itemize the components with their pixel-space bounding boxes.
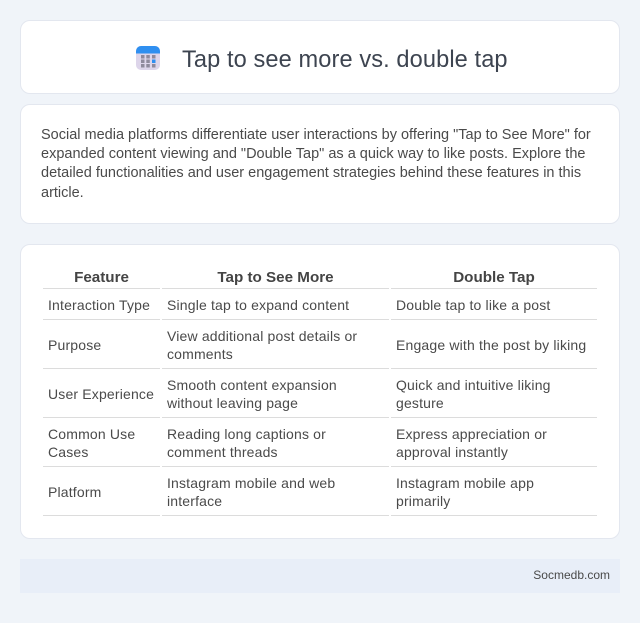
cell: tap purpose: comments [167,346,233,362]
cell: tap use cases [167,426,326,460]
intro paragraph: detailed functionalities and user engagement strategies behind these features in this [41,165,581,181]
panel: header [20,20,620,94]
panel: intro text [20,104,620,224]
row label: Purpose: Purpose [48,337,101,353]
cell: double tap platform: Instagram mobile app [396,475,534,491]
cell: double tap experience [396,377,551,411]
cell: tap experience [167,377,337,411]
cell: double tap use cases: Express appreciation or [396,426,547,442]
cell: tap experience: without leaving page [167,395,298,411]
footer bar [20,559,620,593]
cell: double tap use cases: approval instantly [396,444,508,460]
cell: tap interaction: Single tap to expand content [167,297,349,313]
cell: tap platform [167,475,335,509]
cell: double tap platform [396,475,534,509]
cell: tap experience: Smooth content expansion [167,377,337,393]
cell: tap platform: Instagram mobile and web [167,475,335,491]
icon: calendar [136,46,160,70]
row label: User Experience: User Experience [48,386,154,402]
cell: double tap purpose: Engage with the post by liking [396,337,586,353]
cell: tap purpose: View additional post details or [167,328,357,344]
table header: Tap to See More: Tap to See More [217,269,334,286]
footer source text: Socmedb.com [533,568,610,582]
intro paragraph: article. [41,185,84,201]
cell: tap purpose [167,328,357,362]
cell: double tap experience: Quick and intuitive liking [396,377,551,393]
row label: Interaction Type: Interaction Type [48,297,150,313]
row label: Common Use Cases: Common Use [48,426,135,442]
row label: Common Use Cases: Cases [48,444,89,460]
row label: Platform: Platform [48,484,101,500]
cell: tap use cases: comment threads [167,444,278,460]
cell: tap use cases: Reading long captions or [167,426,326,442]
cell: tap platform: interface [167,493,222,509]
intro paragraph: Social media platforms differentiate user interactions by offering "Tap to See More" for [41,127,591,143]
cell: double tap use cases [396,426,547,460]
table header: Feature: Feature [74,269,129,286]
table header: Double Tap: Double Tap [453,269,535,286]
cell: double tap interaction: Double tap to like a post [396,297,550,313]
intro paragraph [41,127,591,201]
cell: double tap experience: gesture [396,395,444,411]
panel: comparison table [20,244,620,539]
row label: Common Use Cases [48,426,135,460]
cell: double tap platform: primarily [396,493,450,509]
title: Tap to see more vs. double tap [182,47,508,73]
intro paragraph: expanded content viewing and "Double Tap" as a quick way to like posts. Explore the [41,146,585,162]
